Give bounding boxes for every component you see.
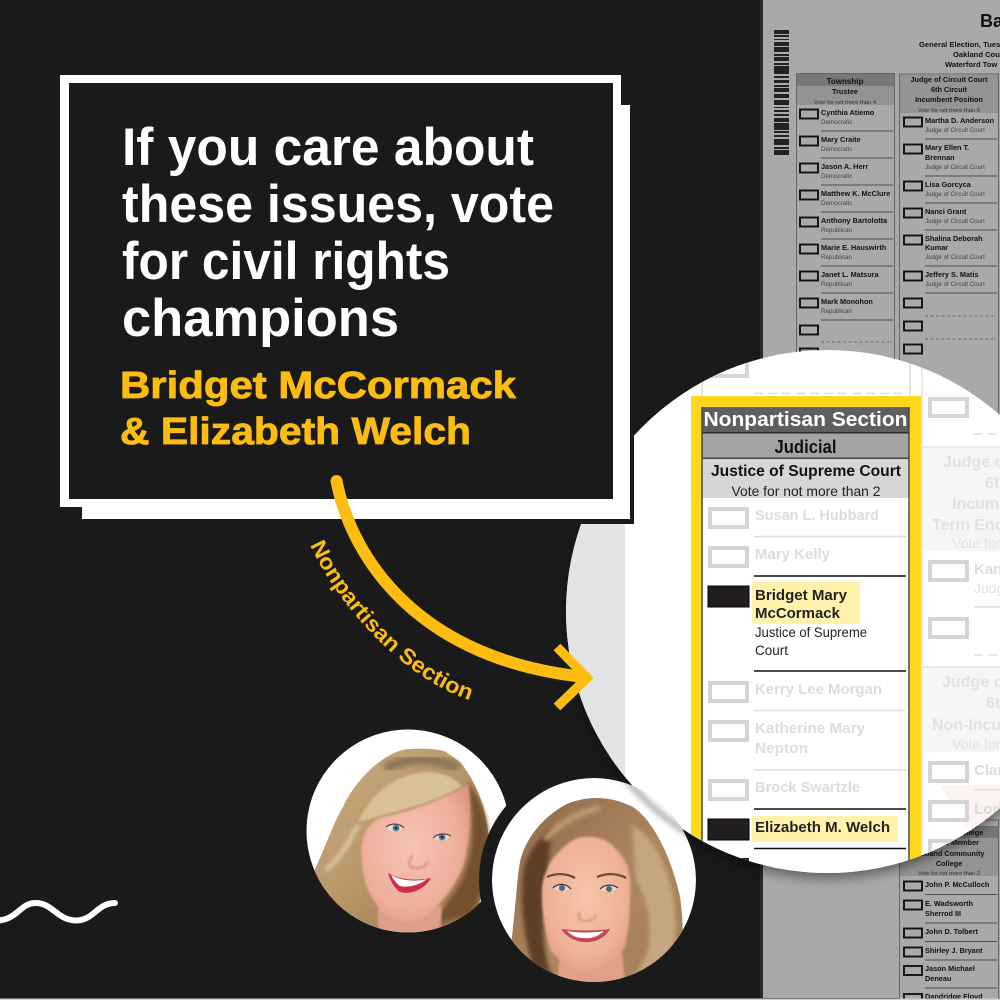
ballot column: Community College: Trustees Member [919, 838, 979, 847]
ballot column: Township: Township [827, 77, 863, 86]
yellow highlight frame [696, 402, 916, 892]
ballot column: Judge of Circuit Court: Judge of Circuit Court [925, 164, 985, 171]
section header: Nonpartisan Section: Nonpartisan Section [704, 409, 908, 431]
candidate: Kerry Lee Morgan: Kerry Lee Morgan [755, 681, 882, 698]
ballot column: Community College: Community College [915, 828, 983, 837]
candidate: Kerry Lee Morgan [710, 681, 906, 710]
card offset shadow [82, 105, 634, 524]
barcode [774, 30, 789, 155]
headline: for civil rights [122, 232, 450, 291]
ballot column: Township: Vote for not more than 4 [814, 100, 877, 106]
right column faded ballot: Incum [952, 496, 999, 513]
ballot column: Township: Republican [821, 281, 853, 288]
hair mass [510, 798, 683, 985]
neck [377, 904, 443, 932]
ballot column: Judge of Circuit Court: Vote for not more than 6 [918, 108, 980, 114]
neck [557, 952, 626, 982]
ballot column: Township: Mark Monohon [821, 297, 873, 306]
ballot column: Judge of Circuit Court: Judge of Circuit Court [925, 218, 985, 225]
decorative squiggle icon [0, 903, 115, 920]
ballot column: Judge of Circuit Court: Brennan [925, 153, 955, 162]
ballot column: Judge of Circuit Court: Judge of Circuit Court [925, 281, 985, 288]
panel: ballot background [760, 0, 1000, 1000]
right column faded ballot: Vote for [952, 736, 1000, 752]
face [362, 785, 470, 922]
magnified ballot lens [560, 345, 1000, 892]
ballot column: Judge of Circuit Court: Judge of Circuit Court [925, 254, 985, 261]
ballot column: Township: Democratic [821, 200, 852, 207]
candidate: Brock Swartzle [710, 779, 906, 809]
ballot column: Township: Jason A. Herr [821, 162, 868, 171]
inner frame edges [702, 407, 909, 880]
candidate: Susan L. Hubbard: Susan L. Hubbard [755, 507, 879, 524]
ballot column: Judge of Circuit Court: Incumbent Position [915, 95, 983, 104]
bottom edge line [0, 998, 1000, 1000]
ballot column: Judge of Circuit Court: Mary Ellen T. [925, 143, 969, 152]
ballot column: Community College: Deneau [925, 974, 951, 983]
right column faded ballot: 6t [986, 695, 1000, 712]
arrow [336, 481, 587, 707]
crown dark band [385, 760, 458, 768]
eyes and brows [386, 824, 451, 840]
candidate: Bridget Mary McCormack [708, 582, 906, 671]
ballot column: Township: Republican [821, 227, 853, 234]
ballot heading: General Election, Tues [919, 40, 1000, 49]
nose [579, 912, 596, 921]
photo: Elizabeth Welch [492, 778, 696, 982]
ballot column: Township: Democratic [821, 146, 852, 153]
office: Justice of Supreme Court: Vote for not more than 2 [732, 483, 881, 499]
ballot column: Community College: John P. McCulloch [925, 880, 989, 889]
photo: Bridget McCormack [306, 730, 506, 932]
right column faded ballot: 6t [985, 475, 1000, 492]
ballot column: Community College: Shirley J. Bryant [925, 946, 983, 955]
ballot column: Judge of Circuit Court: Judge of Circuit Court [925, 127, 985, 134]
right column faded ballot: Vote for [952, 535, 1000, 551]
ballot column: Community College: John D. Tolbert [925, 927, 979, 936]
top hair highlight [545, 808, 600, 840]
ballot column: Judge of Circuit Court: Judge of Circuit Court [910, 75, 988, 84]
headline [122, 118, 554, 348]
candidate: Bridget Mary McCormack: Justice of Supreme [755, 625, 867, 640]
candidate: Katherine Mary Nepton [710, 720, 906, 770]
candidate: Elizabeth M. Welch [708, 816, 906, 861]
hair mass [314, 748, 488, 932]
ballot heading [919, 11, 1000, 69]
ballot column: Township [796, 74, 894, 374]
left dark hair [522, 828, 552, 976]
ballot column: Township: Mary Craite [821, 135, 861, 144]
right column faded ballot [923, 399, 1000, 859]
page curl shading [620, 782, 688, 840]
candidate: Bridget Mary McCormack: Bridget Mary [755, 587, 848, 604]
mouth [388, 873, 431, 893]
ballot column: Judge of Circuit Court: Kumar [925, 243, 948, 252]
faint upper ballot remnants [690, 345, 922, 850]
ballot column: Community College: E. Wadsworth [925, 899, 973, 908]
bangs light strands [358, 772, 462, 822]
candidate: Susan L. Hubbard [710, 507, 906, 536]
face [542, 837, 631, 971]
ballot column: Community College: College [936, 859, 962, 868]
eyes and brows [547, 874, 626, 892]
ballot column: Township: Republican [821, 308, 853, 315]
candidate: Brock Swartzle: Brock Swartzle [755, 779, 860, 796]
ballot column: Township: Anthony Bartolotta [821, 216, 888, 225]
ballot heading: Waterford Tow [945, 60, 997, 69]
right dark hair [432, 782, 488, 925]
headline: champions [122, 289, 399, 348]
candidate names [120, 365, 517, 453]
panel: headline card [60, 75, 621, 507]
ballot column: Judge of Circuit Court [900, 74, 998, 474]
candidate: Mary Kelly [710, 546, 906, 576]
candidate: Bridget Mary McCormack: McCormack [755, 605, 841, 622]
ballot heading: Oakland Cou [953, 50, 1000, 59]
subheader: Judicial [702, 432, 909, 459]
mouth [561, 929, 610, 942]
ballot column: Judge of Circuit Court: Jeffery S. Matis [925, 270, 979, 279]
ballot column: Judge of Circuit Court: 6th Circuit [931, 85, 968, 94]
ballot column: Township: Democratic [821, 119, 852, 126]
ballot column: Community College: Vote for not more than 2 [918, 871, 980, 877]
candidate: Bridget Mary McCormack: Court [755, 643, 788, 658]
nose [409, 855, 427, 868]
office: Justice of Supreme Court [702, 459, 909, 499]
candidate names: Bridget McCormack [120, 365, 517, 407]
ballot column: Township: Democratic [821, 173, 852, 180]
ballot column: Community College: Oakland Community [914, 849, 985, 858]
ballot column: Township: Trustee [832, 87, 858, 96]
candidate: Katherine Mary Nepton: Nepton [755, 740, 808, 757]
ballot column: Township: Marie E. Hauswirth [821, 243, 886, 252]
dark ring around second photo [479, 765, 709, 995]
lens shadow [570, 362, 1000, 878]
ballot column: Judge of Circuit Court: Judge of Circuit Court [925, 191, 985, 198]
ballot column: Township: Cynthia Atiemo [821, 108, 875, 117]
headline: these issues, vote [122, 175, 554, 234]
candidate names: & Elizabeth Welch [120, 411, 471, 453]
ballot column: Township: Republican [821, 254, 853, 261]
headline: If you care about [122, 118, 534, 177]
candidate: Mary Kelly: Mary Kelly [755, 546, 831, 563]
ballot column: Community College [900, 820, 998, 1000]
ballot column: Judge of Circuit Court: Nanci Grant [925, 207, 967, 216]
ballot column: Community College: Jason Michael [925, 964, 975, 973]
ballot column: Township: Janet L. Matsura [821, 270, 880, 279]
light margin strip [566, 524, 625, 777]
right hair highlight [628, 825, 676, 985]
ballot column: Township: Matthew K. McClure [821, 189, 890, 198]
subheader: Judicial: Judicial [774, 437, 836, 457]
candidate: Elizabeth M. Welch: Elizabeth M. Welch [755, 819, 890, 836]
candidate: Katherine Mary Nepton: Katherine Mary [755, 720, 866, 737]
ballot column: Judge of Circuit Court: Martha D. Anderson [925, 116, 994, 125]
ballot column: Judge of Circuit Court: Shalina Deborah [925, 234, 983, 243]
left hair strands [325, 825, 358, 870]
right column faded ballot: Non-Incu [932, 717, 1000, 734]
ballot column: Judge of Circuit Court: Lisa Gorcyca [925, 180, 972, 189]
ballot column: Community College: Sherrod III [925, 909, 961, 918]
arrow label: Nonpartisan Section [310, 540, 472, 700]
office: Justice of Supreme Court: Justice of Supreme Court [711, 463, 902, 480]
